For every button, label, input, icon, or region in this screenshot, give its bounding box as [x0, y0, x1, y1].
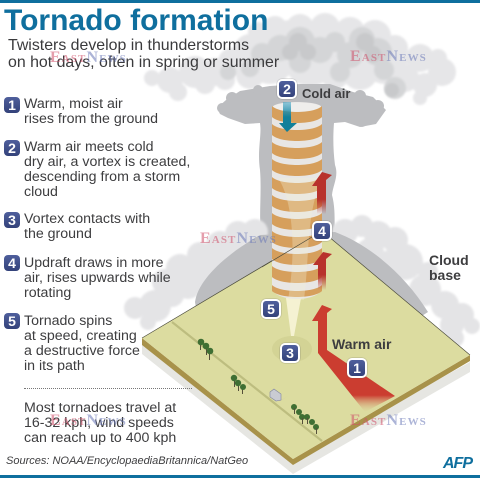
badge 2: 2: [8, 140, 16, 156]
top bar: [0, 0, 480, 3]
map badge 5: 5: [267, 301, 275, 317]
text 5: in its path: [24, 358, 85, 374]
badge 3: 3: [8, 212, 16, 228]
ground edge over vortex: [262, 237, 312, 267]
ground top: [142, 231, 470, 459]
text 5: [24, 313, 140, 374]
map badge 1: 1: [353, 360, 361, 376]
funnel tail: [286, 298, 301, 336]
badge 3: [4, 212, 20, 228]
step 2: [4, 139, 190, 200]
map badge 2: 2: [283, 81, 291, 97]
speed note: can reach up to 400 kph: [24, 430, 176, 446]
map badge 5: [261, 299, 281, 319]
text 4: air, rises upwards while: [24, 270, 171, 286]
text 2: cloud: [24, 184, 58, 200]
map badge 4: 4: [318, 223, 326, 239]
label: cloud base: [429, 252, 469, 283]
touchdown dust: [272, 336, 312, 362]
label: warm air: Warm air: [332, 336, 391, 352]
AFP logo: AFP: [443, 455, 472, 472]
text 3: the ground: [24, 226, 92, 242]
step 4: [4, 255, 171, 301]
arrow: updraft lower: [313, 252, 332, 290]
cloud base: dark mass behind ground: [195, 232, 428, 330]
watermarks: EastNews: [350, 412, 427, 429]
text 1: Warm, moist air: [24, 96, 123, 112]
map badge 3: [280, 343, 300, 363]
badge 5: [4, 313, 20, 329]
text 3: Vortex contacts with: [24, 211, 150, 227]
step 1: [4, 96, 158, 127]
subtitle: [8, 37, 279, 71]
text 5: at speed, creating: [24, 328, 137, 344]
icon: house: [270, 389, 288, 401]
text 1: rises from the ground: [24, 111, 158, 127]
bottom bar: [0, 475, 480, 478]
text 5: a destructive force: [24, 343, 140, 359]
step 5: [4, 313, 140, 374]
map badge 2: [277, 79, 297, 99]
tornado vortex: [272, 102, 322, 300]
ground side: [142, 338, 470, 465]
map badge 1: [347, 358, 367, 378]
sources: Sources: NOAA/EncyclopaediaBritannica/NatGeo: [6, 455, 248, 467]
watermarks: EastNews: [50, 49, 127, 66]
ground far edges: [142, 231, 470, 355]
subtitle: Twisters develop in thunderstorms: [8, 37, 249, 54]
text 1: [24, 96, 158, 127]
icon: trees: [198, 339, 319, 434]
upper storm cloud: dark inner puffs: [282, 33, 399, 97]
badge 1: 1: [8, 97, 16, 113]
text 2: Warm air meets cold: [24, 139, 154, 155]
label: cold air: Cold air: [302, 86, 350, 101]
badge 4: [4, 255, 20, 271]
badge 5: 5: [8, 313, 16, 329]
map badge 4: [312, 221, 332, 241]
upper storm cloud: mid puffs: [220, 27, 406, 99]
text 5: Tornado spins: [24, 313, 112, 329]
text 3: [24, 211, 150, 242]
badge 4: 4: [8, 255, 16, 271]
text 4: rotating: [24, 285, 71, 301]
text 4: [24, 255, 171, 301]
label: cloud base: base: [429, 267, 461, 283]
anvil and column: dark grey cloud: [217, 84, 386, 240]
text 4: Updraft draws in more: [24, 255, 164, 271]
map badge 3: 3: [286, 345, 294, 361]
arrow: warm air: [312, 305, 395, 412]
speed note: [24, 400, 176, 446]
badge 1: [4, 97, 20, 113]
arrow: cold air: [279, 102, 297, 132]
speed note: Most tornadoes travel at: [24, 400, 176, 416]
watermarks: EastNews: [50, 412, 127, 429]
upper storm cloud: light outer puffs: [144, 13, 456, 105]
title: Tornado formation: [4, 4, 268, 37]
cloud base: light puffs: [124, 215, 480, 347]
badge 2: [4, 140, 20, 156]
text 2: [24, 139, 190, 200]
watermarks: EastNews: [350, 48, 427, 65]
speed note: 16-32 kph, wind speeds: [24, 415, 174, 431]
watermarks: EastNews: [200, 230, 277, 247]
text 2: dry air, a vortex is created,: [24, 154, 190, 170]
subtitle: on hot days, often in spring or summer: [8, 54, 279, 71]
road: [172, 322, 322, 441]
ground shadow: [142, 345, 470, 474]
label: cloud base: Cloud: [429, 252, 469, 268]
vortex pale swirl: [278, 178, 322, 300]
text 2: descending from a storm: [24, 169, 180, 185]
step 3: [4, 211, 150, 242]
arrow: updraft upper: [312, 172, 332, 214]
